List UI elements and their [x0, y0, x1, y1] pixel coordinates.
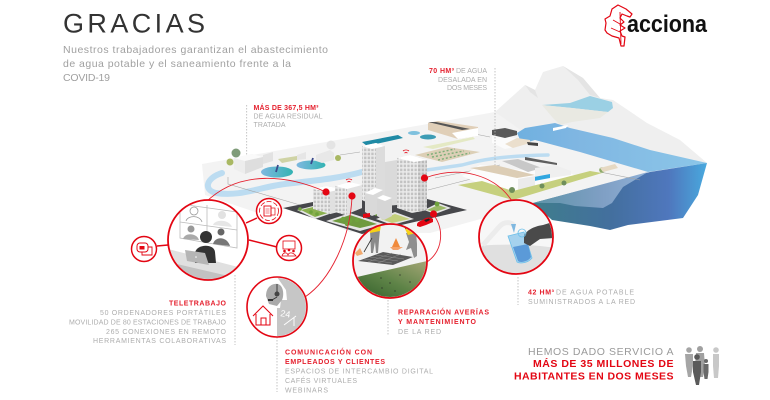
red car [363, 213, 433, 227]
dam wall [542, 105, 608, 125]
label: communication: WEBINARS [285, 388, 328, 394]
dam lake [542, 96, 613, 112]
label: repairs: REPARACIÓN AVERÍAS [398, 308, 489, 316]
label: teleworking: HERRAMIENTAS COLABORATIVAS [93, 338, 226, 345]
icon: people [685, 346, 719, 385]
label: teleworking: 50 ORDENADORES PORTÁTILES [100, 308, 226, 317]
circle: drinking water [478, 200, 556, 280]
label: wastewater: DE AGUA RESIDUAL [254, 114, 323, 120]
label: desalinated water: DE AGUA [456, 68, 487, 75]
crop fields [415, 147, 480, 162]
callout: population served: HABITANTES EN DOS MESES [514, 370, 674, 382]
river [208, 155, 548, 194]
treatment tanks [362, 121, 478, 149]
desalination plant [492, 128, 538, 149]
callout: population served: MÁS DE 35 MILLONES DE [533, 357, 674, 370]
label: wastewater [254, 103, 323, 129]
city streets [283, 197, 467, 234]
wifi icons [346, 150, 409, 182]
label: desalinated water: DOS MESES [447, 85, 487, 92]
label: repairs: Y MANTENIMIENTO [398, 319, 477, 326]
intro text [63, 44, 328, 84]
icon: documents [256, 198, 282, 224]
label: repairs: DE LA RED [398, 329, 441, 336]
dotted leader lines [235, 68, 518, 392]
icon: video chat [132, 236, 156, 262]
label: desalinated water [429, 68, 487, 92]
label: wastewater: TRATADA [254, 122, 286, 129]
label: drinking water: SUMINISTRADOS A LA RED [528, 299, 635, 306]
label: desalinated water: DESALADA EN [438, 77, 487, 84]
label: wastewater: MÁS DE 367,5 HM³ [254, 103, 319, 112]
intro text: Nuestros trabajadores garantizan el abastecimiento [63, 44, 328, 56]
label: repairs [398, 308, 489, 336]
icon: presentation [276, 236, 302, 260]
callout: population served [514, 346, 674, 382]
buildings [313, 143, 427, 220]
callout: population served: HEMOS DADO SERVICIO A [528, 346, 674, 358]
sea [517, 123, 707, 230]
label: drinking water: DE AGUA POTABLE [556, 290, 634, 296]
label: communication: ESPACIOS DE INTERCAMBIO DIGITAL [285, 368, 433, 376]
label: teleworking: TELETRABAJO [169, 300, 227, 308]
mountain [495, 66, 707, 172]
small icon connectors [157, 218, 277, 247]
connector curves [205, 172, 512, 297]
label: communication [285, 348, 433, 394]
label: drinking water [528, 290, 635, 306]
label: communication: CAFÉS VIRTUALES [285, 376, 357, 385]
circle: repairs [350, 224, 430, 300]
circle: communication: 24 [280, 308, 291, 320]
label: teleworking: 265 CONEXIONES EN REMOTO [106, 329, 227, 336]
intro text: de agua potable y el saneamiento frente a la [63, 58, 291, 70]
label: communication: COMUNICACIÓN CON [285, 348, 372, 356]
intro text: COVID-19 [63, 72, 110, 84]
label: desalinated water: 70 HM³ [429, 68, 455, 75]
red pins [322, 174, 437, 218]
pipes [228, 132, 640, 205]
logo: acciona: acciona [627, 11, 707, 38]
logo: acciona [605, 5, 707, 46]
title: GRACIAS [63, 8, 205, 38]
label: drinking water: 42 HM³ [528, 290, 555, 296]
label: teleworking [69, 300, 227, 345]
water treatment plant [458, 157, 618, 200]
circle: teleworking [168, 200, 250, 285]
label: teleworking: MOVILIDAD DE 80 ESTACIONES DE TRABAJO [69, 320, 227, 326]
wastewater plant [226, 140, 341, 178]
label: communication: EMPLEADOS Y CLIENTES [285, 359, 385, 366]
circle: communication [247, 277, 310, 340]
platform [202, 112, 650, 233]
